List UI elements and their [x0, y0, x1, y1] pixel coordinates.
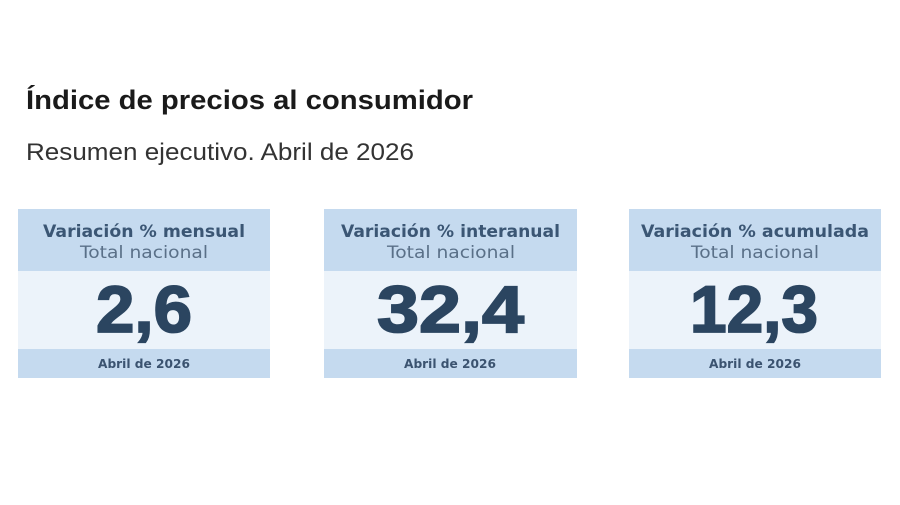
title: Índice de precios al consumidor: [26, 84, 474, 115]
heading: acumulada: Variación % acumulada: [641, 222, 869, 242]
value: interanual: 32,4: [377, 272, 524, 346]
heading: mensual: Variación % mensual: [43, 222, 245, 242]
value: acumulada: 12,3: [690, 272, 818, 346]
date: interanual: Abril de 2026: [404, 357, 496, 371]
panel: variación mensual: [18, 209, 270, 378]
date: mensual: Abril de 2026: [98, 357, 190, 371]
subtitle: Resumen ejecutivo. Abril de 2026: [26, 139, 414, 166]
panel: variación interanual: [324, 209, 577, 378]
value: mensual: 2,6: [96, 272, 192, 346]
subheading: mensual: Total nacional: [79, 243, 208, 263]
subheading: interanual: Total nacional: [386, 243, 515, 263]
heading: interanual: Variación % interanual: [341, 222, 560, 242]
panel: variación acumulada: [629, 209, 881, 378]
subheading: acumulada: Total nacional: [690, 243, 819, 263]
date: acumulada: Abril de 2026: [709, 357, 801, 371]
